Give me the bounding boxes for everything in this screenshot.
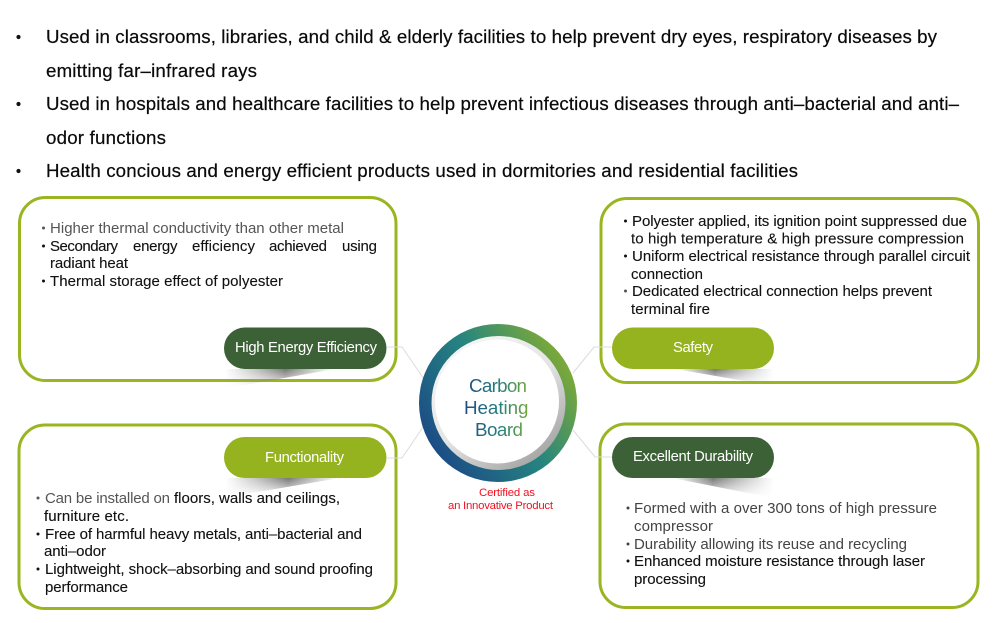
panel: safety	[601, 198, 978, 386]
panel: high energy efficiency: energy	[133, 238, 178, 255]
panel: high energy efficiency: using	[342, 238, 377, 255]
panel: functionality	[19, 425, 396, 608]
panel: excellent durability: compressor	[634, 518, 713, 535]
pill: excellent durability	[612, 437, 774, 478]
panel: functionality: Free of harmful heavy metals, anti–bacterial and	[45, 526, 362, 543]
panel: high energy efficiency: achieved	[269, 238, 327, 255]
panel: high energy efficiency: Higher thermal conductivity than other metal	[50, 220, 344, 237]
certification note	[448, 487, 554, 512]
top bullet list: odor functions	[46, 127, 166, 148]
panel: excellent durability: Durability allowing its reuse and recycling	[634, 536, 907, 553]
connector lines	[387, 347, 612, 458]
top bullet list	[16, 26, 960, 181]
panel: functionality: furniture etc.	[44, 508, 129, 525]
panel: high energy efficiency: efficiency	[192, 238, 256, 255]
central circle: carbon heating board: Heating	[464, 397, 528, 418]
panel: safety: Dedicated electrical connection helps prevent	[632, 283, 933, 300]
top bullet list: Used in classrooms, libraries, and child & elderly facilities to help prevent dry eyes, respiratory diseases by	[46, 26, 938, 47]
pill: high energy efficiency: High Energy Efficiency	[235, 340, 378, 356]
pill: functionality: Functionality	[265, 450, 345, 466]
pill: excellent durability: Excellent Durability	[633, 449, 754, 465]
top bullet list: emitting far–infrared rays	[46, 60, 257, 81]
panel: functionality: Can be installed on	[45, 490, 170, 507]
panel: safety: Uniform electrical resistance through parallel circuit	[632, 248, 971, 265]
panel: safety: connection	[631, 266, 703, 283]
pill: high energy efficiency	[224, 328, 386, 369]
panel: functionality: anti–odor	[44, 543, 106, 560]
panel: safety: terminal fire	[631, 301, 710, 318]
pill shadow	[230, 478, 336, 494]
certification note: an Innovative Product	[448, 500, 554, 512]
panel: excellent durability: Enhanced moisture resistance through laser	[634, 553, 925, 570]
top bullet list: Used in hospitals and healthcare facilities to help prevent infectious diseases through anti–bacterial and anti–	[46, 93, 960, 114]
panel: functionality: floors, walls and ceilings,	[174, 490, 340, 507]
panel: excellent durability: Formed with a over 300 tons of high pressure	[634, 500, 937, 517]
panel: excellent durability: processing	[634, 571, 706, 588]
panel: functionality: performance	[45, 579, 128, 596]
panel: high energy efficiency: Thermal storage effect of polyester	[50, 273, 283, 290]
panel: safety: Polyester applied, its ignition point suppressed due	[632, 213, 967, 230]
pill shadow	[678, 369, 769, 382]
panel: high energy efficiency: Secondary	[50, 238, 118, 255]
pill shadow	[675, 478, 770, 494]
panel: safety: to high temperature & high pressure compression	[631, 230, 964, 248]
central circle: carbon heating board: Board	[475, 419, 523, 440]
top bullet list: Health concious and energy efficient products used in dormitories and residential facilities	[46, 160, 798, 181]
panel: functionality: Lightweight, shock–absorbing and sound proofing	[45, 561, 373, 578]
pill shadow	[230, 369, 331, 384]
panel: high energy efficiency: radiant heat	[50, 255, 129, 272]
certification note: Certified as	[479, 487, 535, 499]
central circle: carbon heating board: Carbon	[469, 375, 527, 396]
pill: safety: Safety	[673, 340, 714, 356]
central circle: carbon heating board	[419, 324, 577, 482]
panel: high energy efficiency	[20, 198, 396, 388]
pill: functionality	[224, 437, 386, 478]
pill: safety	[612, 328, 774, 369]
panel: excellent durability	[600, 424, 978, 608]
